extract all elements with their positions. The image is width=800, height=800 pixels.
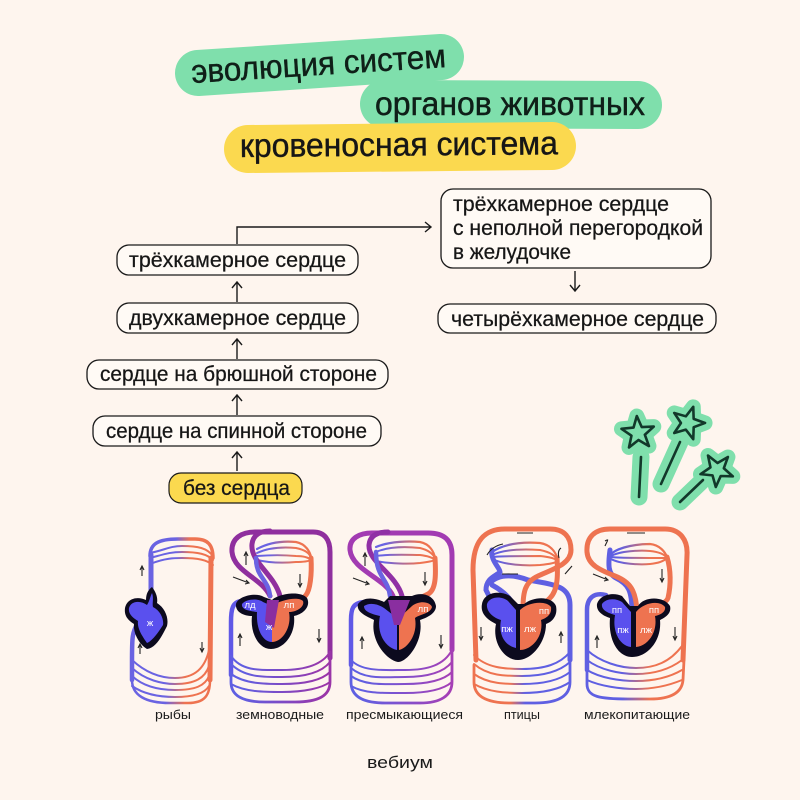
label: млекопитающие: млекопитающие: [584, 707, 690, 722]
mammal arrows: [593, 533, 677, 648]
box: четырёхкамерное сердце: четырёхкамерное сердце: [451, 308, 704, 331]
mammal heart: пж: [617, 625, 629, 636]
amphibian heart: лд: [244, 600, 256, 611]
diagram: fish: [125, 539, 213, 703]
icon: magic wands with stars: [621, 402, 740, 502]
arrow up 2: [232, 395, 242, 415]
fish gills: [150, 539, 213, 565]
bird heart: пж: [501, 624, 513, 635]
box: без сердца: без сердца: [183, 477, 290, 500]
label: птицы: птицы: [504, 707, 540, 722]
fish capillaries: [132, 650, 210, 703]
arrow up 3: [232, 339, 242, 359]
diagram: mammals: [587, 529, 687, 699]
mammal heart: [597, 594, 670, 657]
box: трёхкамерное сердце с неполной перегородкой: в желудочке: [453, 241, 571, 264]
amphibian arrows: [233, 552, 321, 646]
box: сердце на брюшной стороне: сердце на брюшной стороне: [100, 363, 377, 386]
bird gills: [492, 543, 558, 565]
bird arrows: [479, 533, 572, 643]
bird heart: пп: [539, 606, 549, 617]
box: трёхкамерное сердце с неполной перегородкой: с неполной перегородкой: [453, 217, 703, 240]
arrow down: [570, 271, 580, 291]
amphibian blue and red vessels: [256, 558, 270, 596]
reptile capillaries: [351, 650, 452, 703]
fish heart: [125, 587, 168, 649]
box: трёхкамерное сердце с неполной перегородкой: трёхкамерное сердце: [453, 193, 669, 216]
reptile heart: лп: [418, 604, 428, 615]
box: двухкамерное сердце: двухкамерное сердце: [129, 307, 346, 330]
mammal heart: лж: [640, 625, 653, 636]
fish arrows: [138, 566, 204, 654]
reptile blue and red vessels: [376, 552, 390, 596]
flow chart: [87, 189, 716, 503]
title: [190, 37, 645, 164]
bird blue vessels: [486, 550, 500, 598]
box: трёхкамерное сердце с неполной перегородкой: [441, 189, 711, 268]
reptile heart: [358, 594, 436, 662]
diagram: amphibians: [231, 531, 330, 702]
reptile systemic purple loop: [350, 533, 452, 650]
mammal heart: пп: [612, 605, 622, 616]
label: пресмыкающиеся: пресмыкающиеся: [346, 707, 463, 722]
reptile arrows: [353, 553, 443, 649]
bird red vessels: [473, 529, 571, 660]
reptile gills: [376, 542, 435, 564]
label: рыбы: рыбы: [155, 707, 191, 722]
wand 1: [621, 415, 655, 497]
fish arteries and veins: [210, 558, 211, 680]
wand 2: [661, 402, 709, 484]
box: сердце на спинной стороне: сердце на спинной стороне: [106, 420, 367, 443]
title line 1 pill: эволюция систем: [190, 37, 447, 90]
box: трёхкамерное сердце: [117, 245, 358, 275]
mammal heart: пп: [649, 605, 659, 616]
mammal blue vessels: [609, 550, 632, 612]
mammal gills: [611, 544, 667, 564]
wand 3: [680, 447, 740, 502]
amphibian heart: [236, 594, 308, 649]
amphibian heart: лп: [284, 600, 294, 611]
amphibian gills: [257, 542, 311, 563]
bird heart: [482, 593, 556, 660]
diagram: birds: [473, 529, 572, 703]
box: без сердца: [169, 473, 302, 503]
fish heart: ж: [147, 618, 154, 629]
brand: вебиум: вебиум: [367, 753, 433, 772]
title line 2 pill: органов животных: [375, 85, 645, 122]
label: земноводные: земноводные: [236, 707, 324, 722]
amphibian systemic purple loop: [232, 532, 330, 658]
arrow elbow to right box: [237, 222, 431, 244]
arrow up 1: [232, 452, 242, 471]
bird heart: лж: [524, 624, 537, 635]
title line 3 pill: кровеносная система: [240, 124, 559, 164]
mammal red vessels: [587, 529, 687, 660]
mammal capillaries: [587, 646, 684, 699]
bird capillaries: [474, 652, 570, 703]
box: трёхкамерное сердце: трёхкамерное сердце: [129, 249, 346, 272]
amphibian heart: ж: [266, 622, 273, 633]
arrow up 4: [232, 282, 242, 302]
diagram: reptiles: [350, 532, 452, 703]
box: двухкамерное сердце: [117, 303, 358, 333]
amphibian capillaries: [231, 652, 330, 702]
